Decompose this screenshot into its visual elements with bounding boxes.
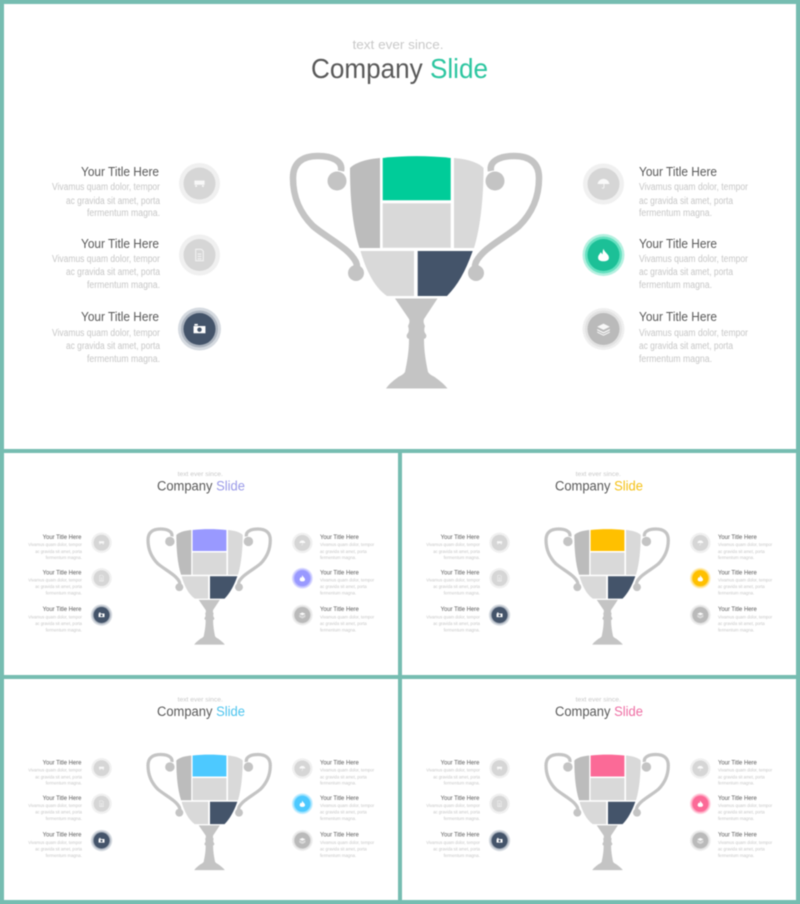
item: right 2: ac gravida sit amet, porta bbox=[718, 584, 765, 590]
item: right 1: ac gravida sit amet, porta bbox=[718, 774, 765, 780]
icon: document bbox=[179, 234, 220, 276]
item: left 2: ac gravida sit amet, porta bbox=[66, 267, 160, 278]
item: right 3: ac gravida sit amet, porta bbox=[639, 341, 733, 352]
icon: umbrella bbox=[292, 533, 313, 553]
item: left 3 bbox=[426, 606, 480, 633]
item: right 3 bbox=[639, 309, 749, 365]
item: left 2: fermentum magna. bbox=[46, 816, 82, 822]
item: left 3 bbox=[52, 309, 161, 365]
item: left 2 bbox=[426, 795, 480, 822]
item: right 2: ac gravida sit amet, porta bbox=[320, 810, 367, 816]
item: right 1: fermentum magna. bbox=[718, 780, 754, 786]
icon: document bbox=[91, 794, 112, 814]
item: right 2 bbox=[718, 570, 772, 597]
item: left 1: Vivamus quam dolor, tempor bbox=[426, 542, 480, 548]
item: right 2: Vivamus quam dolor, tempor bbox=[320, 578, 374, 584]
item: left 1 bbox=[426, 534, 480, 561]
item: right 3 bbox=[320, 832, 374, 859]
icon: layers bbox=[582, 308, 624, 350]
panel: yellow variant bbox=[402, 453, 796, 675]
item: left 1: Your Title Here bbox=[43, 759, 82, 766]
icon: camera bbox=[489, 604, 510, 626]
item: right 3: fermentum magna. bbox=[320, 627, 356, 633]
item: left 2: Your Title Here bbox=[441, 795, 480, 802]
item: right 1: Your Title Here bbox=[320, 759, 359, 766]
item: right 1: ac gravida sit amet, porta bbox=[639, 196, 733, 207]
item: left 2: Vivamus quam dolor, tempor bbox=[28, 578, 82, 584]
heading: Company Slide bbox=[555, 703, 643, 719]
item: left 1: Your Title Here bbox=[81, 164, 159, 179]
item: right 2: fermentum magna. bbox=[320, 816, 356, 822]
heading: Company Slide bbox=[311, 53, 488, 84]
item: right 1: Vivamus quam dolor, tempor bbox=[718, 767, 772, 773]
item: left 1: Vivamus quam dolor, tempor bbox=[28, 767, 82, 773]
icon: bed bbox=[91, 758, 112, 778]
item: right 3: ac gravida sit amet, porta bbox=[718, 621, 765, 627]
item: left 3: Your Title Here bbox=[441, 606, 480, 613]
item: left 3: Vivamus quam dolor, tempor bbox=[52, 328, 161, 339]
icon: umbrella bbox=[690, 533, 711, 553]
item: right 1: Vivamus quam dolor, tempor bbox=[320, 542, 374, 548]
item: left 3: fermentum magna. bbox=[46, 627, 82, 633]
icon: flame bbox=[582, 234, 624, 276]
item: right 2: Your Title Here bbox=[718, 795, 757, 802]
item: right 1 bbox=[718, 759, 772, 786]
item: right 1: ac gravida sit amet, porta bbox=[718, 549, 765, 555]
item: left 1: fermentum magna. bbox=[444, 780, 480, 786]
item: left 1: ac gravida sit amet, porta bbox=[66, 196, 160, 207]
icon: flame bbox=[690, 568, 711, 589]
item: left 3: Vivamus quam dolor, tempor bbox=[426, 614, 480, 620]
item: right 3: Vivamus quam dolor, tempor bbox=[718, 840, 772, 846]
panel: purple variant bbox=[4, 453, 398, 675]
item: right 2: Vivamus quam dolor, tempor bbox=[718, 803, 772, 809]
item: right 2: fermentum magna. bbox=[718, 591, 754, 597]
item: left 3: Vivamus quam dolor, tempor bbox=[28, 840, 82, 846]
panel: pink variant bbox=[402, 679, 796, 900]
panel: main slide green bbox=[4, 4, 796, 449]
item: right 2: Your Title Here bbox=[320, 570, 359, 577]
icon: document bbox=[91, 568, 112, 588]
item: left 1: fermentum magna. bbox=[46, 555, 82, 561]
item: right 3: Your Title Here bbox=[639, 309, 717, 324]
icon: layers bbox=[292, 830, 313, 851]
item: left 3: ac gravida sit amet, porta bbox=[35, 846, 82, 852]
item: right 2: Your Title Here bbox=[639, 236, 717, 251]
item: left 1 bbox=[28, 534, 82, 561]
item: left 1: Vivamus quam dolor, tempor bbox=[28, 542, 82, 548]
item: left 3: fermentum magna. bbox=[46, 853, 82, 859]
item: right 2: Vivamus quam dolor, tempor bbox=[718, 578, 772, 584]
item: left 2 bbox=[28, 795, 82, 822]
item: left 3: ac gravida sit amet, porta bbox=[433, 846, 480, 852]
item: left 1: ac gravida sit amet, porta bbox=[35, 549, 82, 555]
item: right 1: Vivamus quam dolor, tempor bbox=[639, 182, 749, 193]
icon: bed bbox=[489, 533, 510, 553]
item: right 3 bbox=[718, 832, 772, 859]
item: left 3: Your Title Here bbox=[43, 606, 82, 613]
item: left 3: ac gravida sit amet, porta bbox=[66, 341, 160, 352]
item: left 2: ac gravida sit amet, porta bbox=[433, 584, 480, 590]
item: right 1: fermentum magna. bbox=[718, 555, 754, 561]
item: left 2: Vivamus quam dolor, tempor bbox=[52, 254, 161, 265]
item: left 2: Your Title Here bbox=[43, 795, 82, 802]
item: left 1: fermentum magna. bbox=[444, 555, 480, 561]
item: right 2: ac gravida sit amet, porta bbox=[718, 810, 765, 816]
item: left 2 bbox=[52, 236, 161, 291]
item: right 3: ac gravida sit amet, porta bbox=[320, 621, 367, 627]
item: right 3 bbox=[718, 606, 772, 633]
item: left 1 bbox=[52, 164, 161, 219]
icon: flame bbox=[292, 793, 313, 814]
item: right 3: Vivamus quam dolor, tempor bbox=[320, 840, 374, 846]
item: right 2: Your Title Here bbox=[718, 570, 757, 577]
item: left 3: ac gravida sit amet, porta bbox=[433, 621, 480, 627]
icon: layers bbox=[690, 830, 711, 851]
item: left 3: Your Title Here bbox=[43, 832, 82, 839]
icon: umbrella bbox=[292, 758, 313, 779]
item: right 3: ac gravida sit amet, porta bbox=[320, 846, 367, 852]
item: left 1: Your Title Here bbox=[441, 759, 480, 766]
item: left 2: Vivamus quam dolor, tempor bbox=[28, 803, 82, 809]
icon: camera bbox=[91, 604, 112, 626]
item: right 1: Your Title Here bbox=[718, 759, 757, 766]
item: left 2: Vivamus quam dolor, tempor bbox=[426, 578, 480, 584]
trophy chart bbox=[546, 529, 668, 645]
item: right 1: fermentum magna. bbox=[320, 780, 356, 786]
item: left 2: Vivamus quam dolor, tempor bbox=[426, 803, 480, 809]
item: right 2: ac gravida sit amet, porta bbox=[320, 584, 367, 590]
item: left 2: Your Title Here bbox=[81, 236, 159, 251]
item: right 2: Vivamus quam dolor, tempor bbox=[320, 803, 374, 809]
item: left 3 bbox=[28, 606, 82, 633]
item: right 1: Vivamus quam dolor, tempor bbox=[320, 767, 374, 773]
item: right 2 bbox=[320, 795, 374, 822]
item: right 1 bbox=[320, 534, 374, 561]
item: right 3: ac gravida sit amet, porta bbox=[718, 846, 765, 852]
item: left 3: Your Title Here bbox=[81, 309, 159, 324]
icon: document bbox=[489, 794, 510, 814]
item: right 2: ac gravida sit amet, porta bbox=[639, 267, 733, 278]
icon: umbrella bbox=[583, 164, 624, 204]
item: left 1: ac gravida sit amet, porta bbox=[35, 774, 82, 780]
trophy chart bbox=[148, 529, 270, 645]
item: right 1: ac gravida sit amet, porta bbox=[320, 774, 367, 780]
item: right 3: fermentum magna. bbox=[718, 853, 754, 859]
item: right 3: fermentum magna. bbox=[639, 354, 712, 365]
item: right 1: ac gravida sit amet, porta bbox=[320, 549, 367, 555]
item: left 2: fermentum magna. bbox=[444, 816, 480, 822]
icon: layers bbox=[690, 605, 711, 625]
item: right 2 bbox=[639, 236, 749, 291]
item: left 2: Your Title Here bbox=[43, 570, 82, 577]
item: right 2 bbox=[718, 795, 772, 822]
item: left 2: fermentum magna. bbox=[444, 591, 480, 597]
item: right 1: fermentum magna. bbox=[320, 555, 356, 561]
item: right 1: Vivamus quam dolor, tempor bbox=[718, 542, 772, 548]
icon: umbrella bbox=[690, 758, 711, 779]
item: right 3: Your Title Here bbox=[718, 606, 757, 613]
item: right 2 bbox=[320, 570, 374, 597]
item: right 2: fermentum magna. bbox=[718, 816, 754, 822]
item: right 2: fermentum magna. bbox=[639, 280, 712, 291]
item: left 1: ac gravida sit amet, porta bbox=[433, 774, 480, 780]
item: left 1 bbox=[426, 759, 480, 786]
item: right 2: Your Title Here bbox=[320, 795, 359, 802]
item: left 2: fermentum magna. bbox=[87, 280, 160, 291]
item: right 3: Vivamus quam dolor, tempor bbox=[718, 614, 772, 620]
icon: flame bbox=[690, 793, 711, 814]
item: right 3: Vivamus quam dolor, tempor bbox=[639, 328, 749, 339]
item: right 1 bbox=[320, 759, 374, 786]
item: left 1 bbox=[28, 759, 82, 786]
item: left 1: Your Title Here bbox=[43, 534, 82, 541]
item: left 2: fermentum magna. bbox=[46, 591, 82, 597]
item: left 3: fermentum magna. bbox=[87, 354, 160, 365]
subtitle: text ever since. bbox=[352, 38, 444, 52]
item: left 2 bbox=[28, 570, 82, 597]
item: right 3: fermentum magna. bbox=[718, 627, 754, 633]
icon: camera bbox=[178, 308, 221, 350]
item: left 3 bbox=[28, 832, 82, 859]
item: right 1: Your Title Here bbox=[718, 534, 757, 541]
item: right 1: Your Title Here bbox=[320, 534, 359, 541]
panel: cyan variant bbox=[4, 679, 398, 900]
heading: Company Slide bbox=[555, 477, 643, 493]
icon: bed bbox=[91, 533, 112, 553]
item: left 2 bbox=[426, 570, 480, 597]
icon: camera bbox=[91, 830, 112, 851]
subtitle: text ever since. bbox=[576, 696, 621, 703]
item: right 3: Your Title Here bbox=[320, 606, 359, 613]
item: left 1: Vivamus quam dolor, tempor bbox=[52, 182, 161, 193]
item: right 3: Your Title Here bbox=[320, 832, 359, 839]
item: right 1: fermentum magna. bbox=[639, 208, 712, 219]
item: left 2: ac gravida sit amet, porta bbox=[35, 584, 82, 590]
item: right 2: Vivamus quam dolor, tempor bbox=[639, 254, 749, 265]
icon: flame bbox=[292, 568, 313, 589]
icon: layers bbox=[292, 605, 313, 625]
trophy chart bbox=[148, 755, 270, 870]
heading: Company Slide bbox=[157, 477, 245, 493]
item: left 1: Your Title Here bbox=[441, 534, 480, 541]
item: left 2: ac gravida sit amet, porta bbox=[433, 810, 480, 816]
item: left 3: Your Title Here bbox=[441, 832, 480, 839]
item: right 1 bbox=[718, 534, 772, 561]
item: right 2: fermentum magna. bbox=[320, 591, 356, 597]
icon: bed bbox=[179, 163, 220, 204]
item: right 3: fermentum magna. bbox=[320, 853, 356, 859]
item: left 3: ac gravida sit amet, porta bbox=[35, 621, 82, 627]
subtitle: text ever since. bbox=[178, 471, 223, 478]
item: left 1: fermentum magna. bbox=[87, 208, 160, 219]
item: left 3: fermentum magna. bbox=[444, 627, 480, 633]
item: left 3: fermentum magna. bbox=[444, 853, 480, 859]
item: right 3: Vivamus quam dolor, tempor bbox=[320, 614, 374, 620]
item: left 1: Vivamus quam dolor, tempor bbox=[426, 767, 480, 773]
item: left 2: ac gravida sit amet, porta bbox=[35, 810, 82, 816]
icon: camera bbox=[489, 830, 510, 851]
item: right 3: Your Title Here bbox=[718, 832, 757, 839]
item: left 3 bbox=[426, 832, 480, 859]
subtitle: text ever since. bbox=[178, 696, 223, 703]
trophy chart bbox=[546, 755, 668, 870]
trophy chart bbox=[293, 156, 539, 388]
icon: document bbox=[489, 568, 510, 588]
item: left 3: Vivamus quam dolor, tempor bbox=[426, 840, 480, 846]
item: left 1: ac gravida sit amet, porta bbox=[433, 549, 480, 555]
item: left 1: fermentum magna. bbox=[46, 780, 82, 786]
item: right 1 bbox=[639, 164, 749, 219]
heading: Company Slide bbox=[157, 703, 245, 719]
subtitle: text ever since. bbox=[576, 471, 621, 478]
item: left 3: Vivamus quam dolor, tempor bbox=[28, 614, 82, 620]
item: left 2: Your Title Here bbox=[441, 570, 480, 577]
item: right 1: Your Title Here bbox=[639, 164, 717, 179]
item: right 3 bbox=[320, 606, 374, 633]
icon: bed bbox=[489, 758, 510, 778]
